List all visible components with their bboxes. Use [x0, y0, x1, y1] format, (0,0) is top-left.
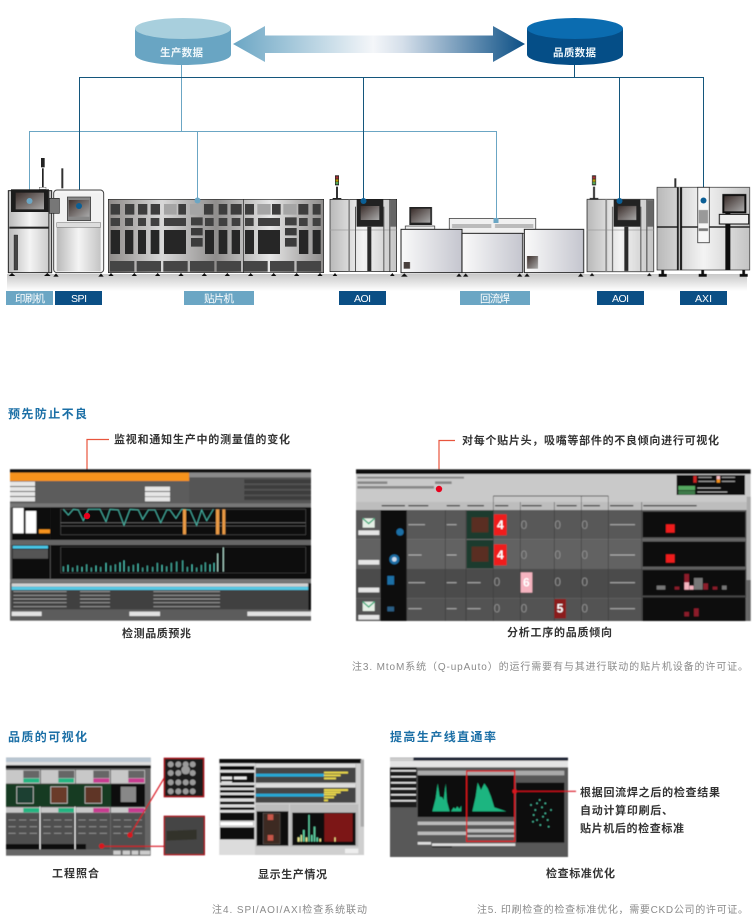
machine: AXI: [657, 178, 750, 277]
connection lines: quality data: [80, 65, 704, 206]
count boxes and values: [494, 514, 588, 618]
red connector lines: [102, 777, 165, 846]
count boxes and values: 0: [581, 518, 588, 532]
count boxes and values: 4: [497, 548, 504, 562]
double-headed arrow: [233, 26, 525, 62]
heading: quality visualization: 品质的可视化: [8, 729, 87, 744]
machine: AOI 2: [587, 175, 654, 276]
icons: envelopes and head symbols: [358, 518, 404, 620]
machine labels: [6, 291, 727, 305]
floor shadow: [7, 274, 747, 291]
callout: automatic criteria calculation: 根据回流焊之后的检查结果: [580, 785, 720, 799]
note 3: 注3. MtoM系统（Q-upAuto）的运行需要有与其进行联动的贴片机设备的许可证。: [352, 660, 748, 673]
callout: monitor measured values: [87, 432, 290, 516]
callout: automatic criteria calculation: 贴片机后的检查标准: [580, 821, 684, 835]
detail image: solder balls: [164, 758, 204, 797]
count boxes and values: 5: [557, 602, 564, 616]
callout: defect tendency by head and nozzle: [439, 433, 719, 489]
screenshot: process quality tendency: [356, 469, 751, 621]
count boxes and values: 6: [523, 576, 530, 590]
count boxes and values: 0: [521, 548, 528, 562]
count boxes and values: 0: [554, 548, 561, 562]
production line machines (right half): [401, 175, 750, 277]
connection lines: production data: [30, 65, 496, 220]
marker dot: quality prediction: [84, 513, 90, 519]
count boxes and values: 0: [554, 518, 561, 532]
trend charts: [643, 512, 745, 621]
count boxes and values: 0: [581, 602, 588, 616]
thumbnails: [467, 511, 493, 568]
heading: first pass yield: 提高生产线直通率: [390, 729, 496, 744]
machine: mounter: [108, 199, 324, 276]
note 4: 注4. SPI/AOI/AXI检查系统联动: [212, 903, 367, 916]
screenshot: inspection criteria optimization: [390, 758, 576, 857]
caption: production status: 显示生产情况: [258, 867, 327, 881]
marker dot: process quality tendency: [436, 486, 442, 492]
count boxes and values: 0: [581, 548, 588, 562]
database: quality data: [527, 18, 623, 65]
connection node dots: [26, 198, 706, 223]
database: production data: 生产数据: [160, 46, 204, 59]
screenshot: process matching: [6, 758, 204, 856]
callout: automatic criteria calculation: 自动计算印刷后、: [580, 803, 673, 817]
count boxes and values: 0: [494, 575, 501, 589]
machine labels: 回流焊: [480, 292, 510, 305]
machine labels: AOI: [612, 293, 629, 305]
count boxes and values: 4: [497, 518, 504, 532]
detail image: component: [164, 816, 204, 855]
machine: reflow oven: [401, 207, 584, 277]
machine labels: 贴片机: [204, 292, 234, 305]
machine labels: AOI: [354, 293, 371, 305]
heading: prevent defects: 预先防止不良: [8, 406, 87, 421]
count boxes and values: 0: [521, 518, 528, 532]
database: quality data: 品质数据: [553, 46, 596, 59]
machine: SPI: [49, 168, 104, 277]
count boxes and values: 0: [494, 602, 501, 616]
machine labels: 印刷机: [15, 292, 46, 305]
production line machines (left half): [8, 158, 397, 277]
machine: AOI 1: [330, 175, 397, 276]
count boxes and values: 0: [581, 575, 588, 589]
count boxes and values: 0: [521, 602, 528, 616]
machine labels: SPI: [71, 293, 87, 305]
caption: criteria optimization: 检查标准优化: [546, 866, 615, 880]
callout: monitor measured values: 监视和通知生产中的测量值的变化: [114, 432, 290, 446]
machine: printer: [8, 158, 52, 276]
caption: process matching: 工程照合: [52, 866, 99, 880]
legend box: [677, 475, 745, 495]
screenshot: quality prediction: [10, 469, 311, 621]
database: production data: [135, 18, 231, 65]
caption: quality prediction: 检测品质预兆: [122, 626, 191, 640]
caption: process quality tendency: 分析工序的品质倾向: [507, 625, 612, 639]
callout: defect tendency by head and nozzle: 对每个贴片头，吸嘴等部件的不良倾向进行可视化: [462, 433, 719, 447]
screenshot: production status: [219, 759, 364, 855]
machine labels: AXI: [695, 293, 712, 305]
count boxes and values: 0: [554, 575, 561, 589]
callout: automatic criteria calculation: [580, 785, 720, 835]
highlight box and connector: [467, 771, 515, 841]
note 5: 注5. 印刷检查的检查标准优化，需要CKD公司的许可证。: [477, 903, 748, 916]
